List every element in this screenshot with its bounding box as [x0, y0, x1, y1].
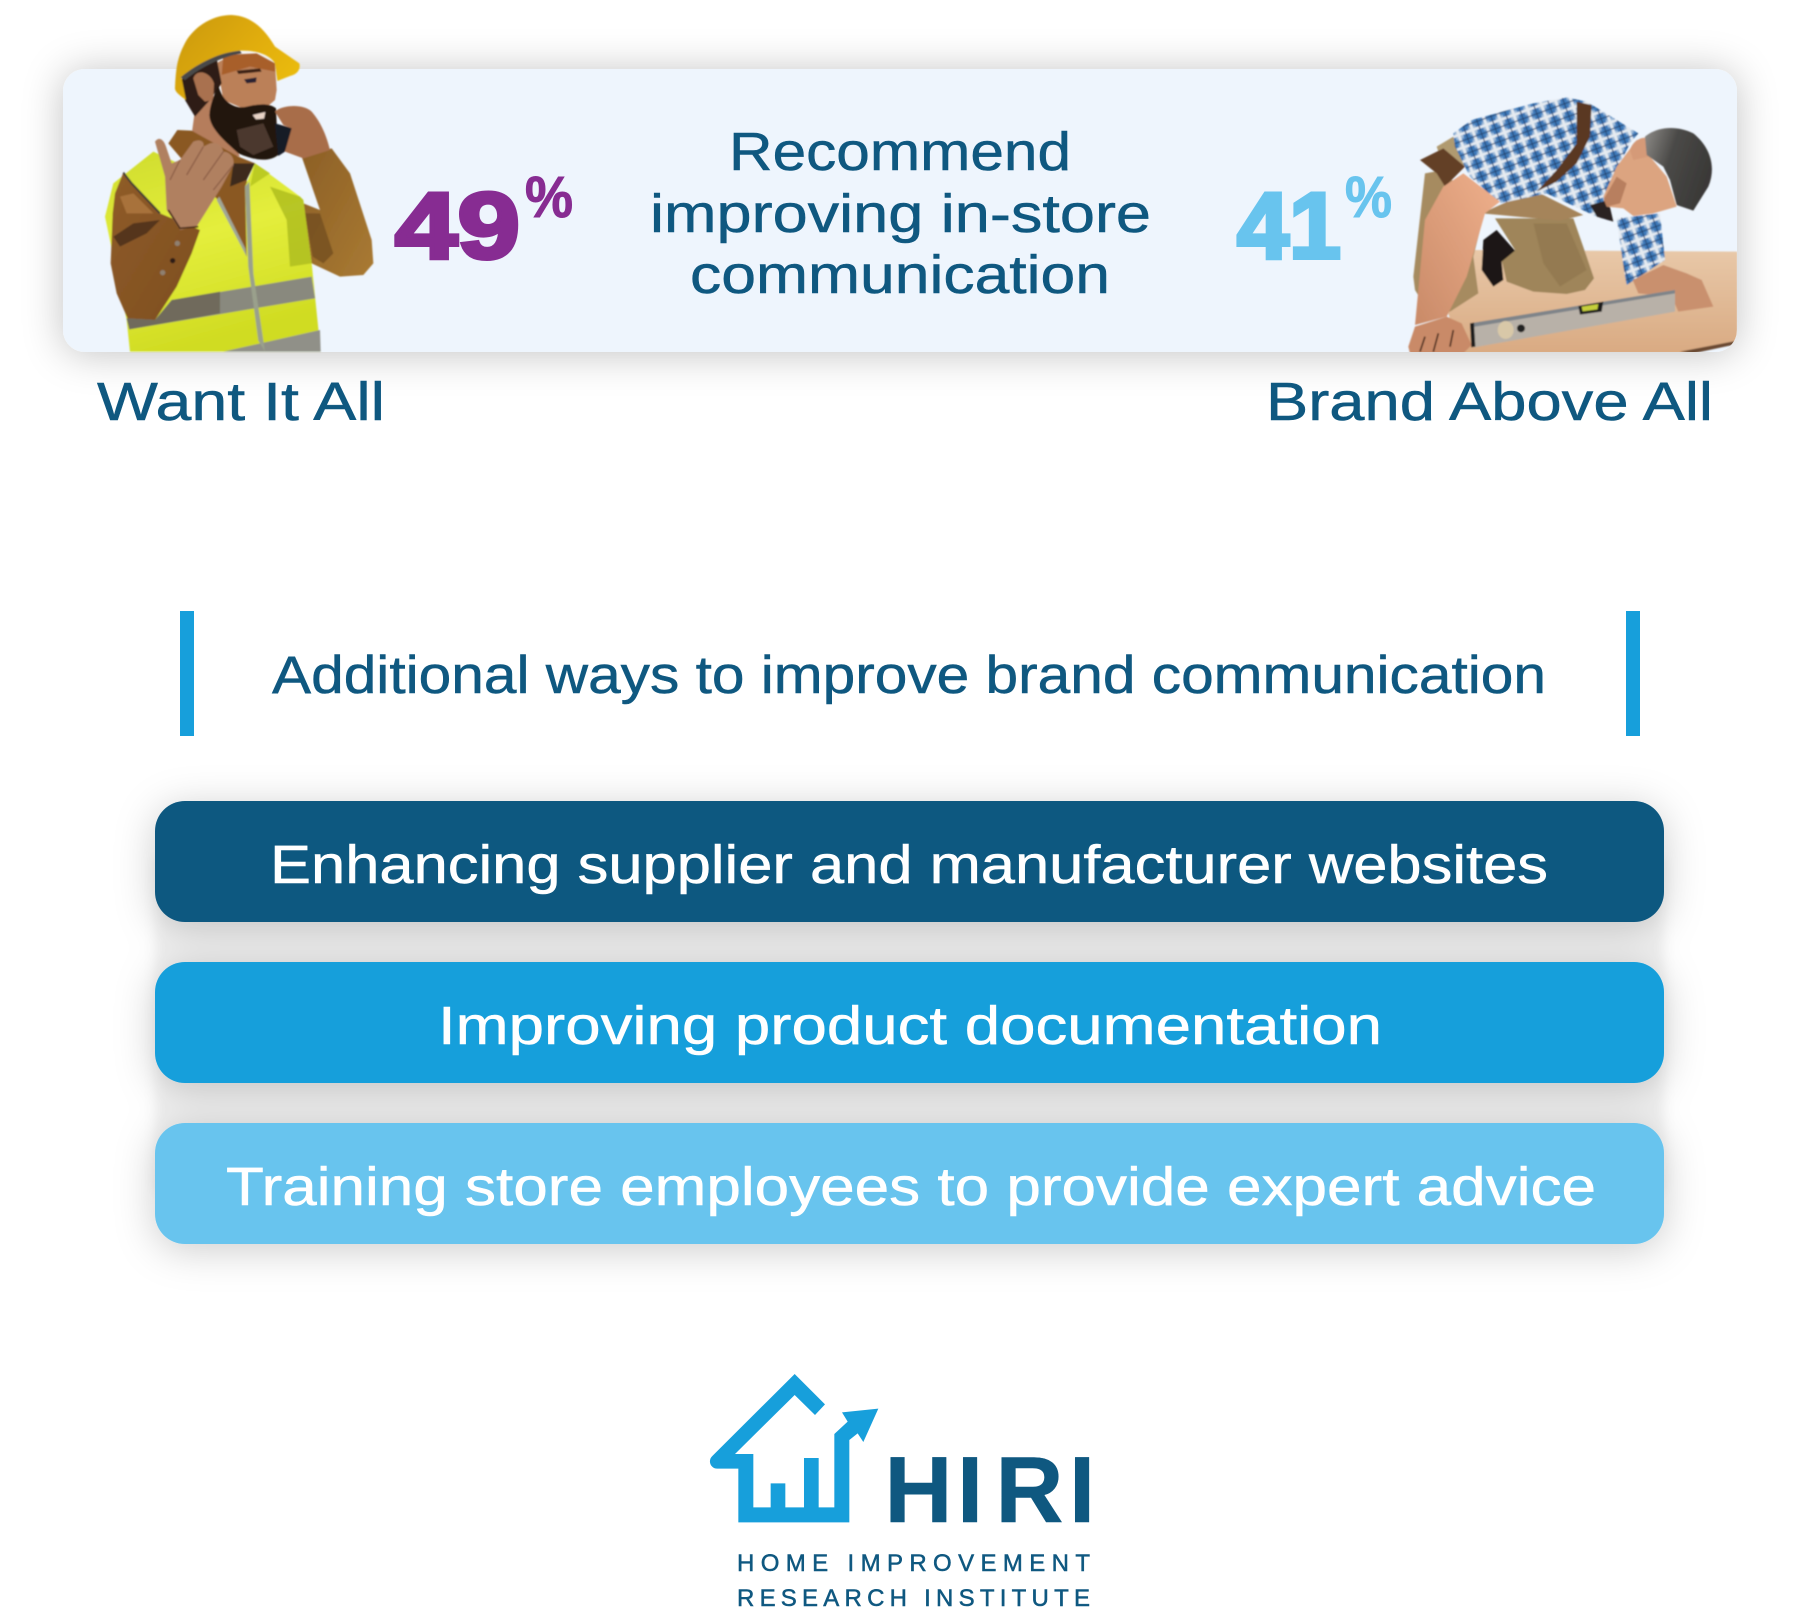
recommendation text: improving in-store [650, 184, 1151, 244]
stat: 49 percent: % [525, 165, 573, 230]
bar text: Training: Training store employees to provide expert advice [226, 1157, 1596, 1217]
stat: 41 percent [1237, 165, 1392, 278]
panel: recommendation banner [63, 15, 1737, 353]
stat: 41 percent: % [1345, 165, 1392, 230]
logo: HIRI [710, 1374, 1095, 1607]
label: Want It All: Want It All [97, 372, 385, 432]
label: Brand Above All: Brand Above All [1266, 372, 1713, 432]
bar text: Improving: Improving product documentation [438, 996, 1382, 1056]
wordmark: HIRI [884, 1437, 1095, 1542]
list of three improvement bars [155, 801, 1664, 1244]
heading: additional ways: Additional ways to improve brand communication [272, 646, 1546, 705]
bar backgrounds [155, 801, 1664, 1244]
tagline [737, 1550, 1090, 1607]
tagline: HOME IMPROVEMENT [737, 1550, 1090, 1577]
stat: 49 percent: 49 [395, 173, 520, 278]
banner background [63, 69, 1737, 352]
stat: 41 percent: 41 [1237, 173, 1341, 278]
stat: 49 percent [395, 165, 573, 278]
photo: worker in hard hat on phone [105, 15, 373, 352]
icon: house with rising chart arrow [710, 1374, 878, 1522]
bar text: Enhancing: Enhancing supplier and manufacturer websites [270, 835, 1548, 895]
recommendation text: communication [690, 245, 1110, 305]
photo: worker checking floor with spirit level [1408, 97, 1737, 353]
recommendation text [650, 122, 1151, 305]
recommendation text: Recommend [729, 122, 1071, 182]
heading: additional ways [180, 611, 1640, 736]
